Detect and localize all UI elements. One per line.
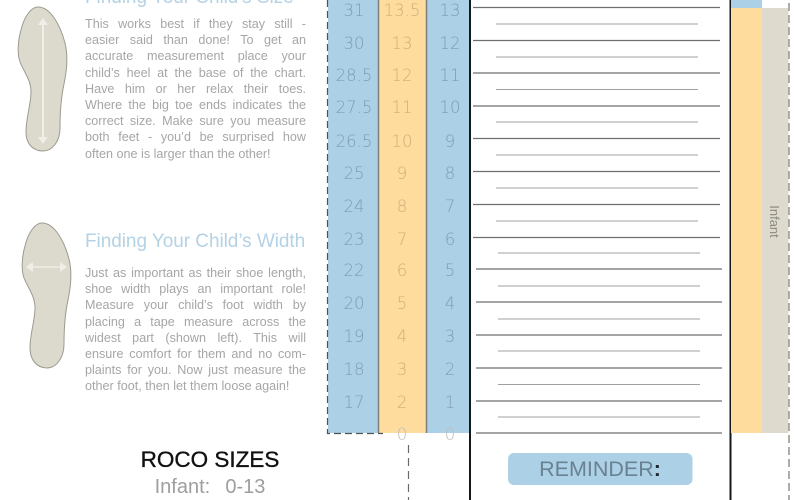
blue column numbers: 10 [440,98,460,117]
text block: finding size: correct size. Make sure you measure [85,114,306,128]
reminder box: REMINDER: [539,457,661,481]
orange column numbers: 12 [392,66,412,85]
chart column: orange sizes [379,0,426,433]
EU size numbers: 25 [344,164,364,183]
blue column numbers: 2 [445,360,455,379]
blue column numbers: 13 [440,1,460,20]
heading: finding width: Finding Your Child’s Width [85,231,305,252]
chart column: blue sizes [427,0,469,433]
blue column numbers: 7 [445,197,455,216]
foot icon: width [22,223,71,368]
text block: finding size: child’s heel at the base of the chart. [85,66,306,80]
EU size numbers: 30 [344,34,364,53]
chart column: blue EU sizes [328,0,378,433]
orange column numbers: 0 [397,425,407,444]
EU size numbers: 27.5 [336,98,372,117]
orange column numbers: 11 [392,98,412,117]
ruled lines: half sizes [496,24,700,417]
text block: finding size [85,17,306,160]
text block: finding width: other foot, then let them loose again! [85,379,289,393]
blue column numbers: 6 [445,230,455,249]
orange column numbers: 6 [397,261,407,280]
blue column numbers: 0 [445,425,455,444]
blue column numbers: 4 [445,294,455,313]
ruled lines: whole sizes [473,8,722,433]
foot icon: length [18,7,67,151]
text block: finding width: placing a tape measure across the [85,315,306,329]
orange column numbers: 9 [397,164,407,183]
orange column numbers: 8 [397,197,407,216]
text block: finding width: Just as important as their shoe length, [85,266,306,280]
title: roco sizes: ROCO SIZES [141,447,279,472]
blue column numbers: 5 [445,261,455,280]
text block: finding size: Have him or her relax their toes. [85,82,306,96]
text block: finding size: accurate measurement place your [85,49,306,63]
EU size numbers: 19 [344,327,364,346]
EU size numbers: 17 [344,393,364,412]
EU size numbers: 18 [344,360,364,379]
text block: finding size: This works best if they stay still - [85,17,306,31]
EU size numbers: 20 [344,294,364,313]
EU size numbers: 26.5 [336,132,372,151]
blue column numbers [440,1,460,444]
text block: finding width: plaints for you. Now just measure the [85,363,306,377]
text block: finding width: ensure comfort for them and no com- [85,347,306,361]
EU size numbers: 28.5 [336,66,372,85]
blue column numbers: 11 [440,66,460,85]
orange column numbers: 5 [397,294,407,313]
orange column numbers: 10 [392,132,412,151]
right band: infant size tab [762,8,788,433]
right band: orange [731,8,762,433]
infant label: Infant [767,205,782,238]
orange column numbers [384,1,420,444]
orange column numbers: 7 [397,230,407,249]
EU size numbers: 31 [344,1,364,20]
blue column numbers: 9 [445,132,455,151]
orange column numbers: 2 [397,393,407,412]
text block: finding size: Where the big toe ends indicates the [85,98,306,112]
orange column numbers: 13 [392,34,412,53]
text block: finding width [85,266,306,393]
EU size numbers [336,1,372,412]
blue column numbers: 1 [445,393,455,412]
text block: finding size: easier said than done! To get an [85,33,306,47]
text block: finding width: Measure your child’s foot width by [85,298,306,312]
blue column numbers: 12 [440,34,460,53]
blue column numbers: 3 [445,327,455,346]
reminder box [508,453,692,485]
text block: finding width: shoe width plays an important role! [85,282,306,296]
orange column numbers: 13.5 [384,1,420,20]
EU size numbers: 22 [344,261,364,280]
EU size numbers: 23 [344,230,364,249]
orange column numbers: 3 [397,360,407,379]
column dividers and dashed cut lines [328,0,789,500]
right band: blue tab [731,0,762,8]
text block: finding size: both feet - you’d be surprised how [85,130,306,144]
infant size range: Infant: 0-13 [155,476,265,498]
EU size numbers: 24 [344,197,364,216]
text block: finding size: often one is larger than the other! [85,146,271,160]
text block: finding width: widest part (shown left). This will [85,331,306,345]
blue column numbers: 8 [445,164,455,183]
orange column numbers: 4 [397,327,407,346]
